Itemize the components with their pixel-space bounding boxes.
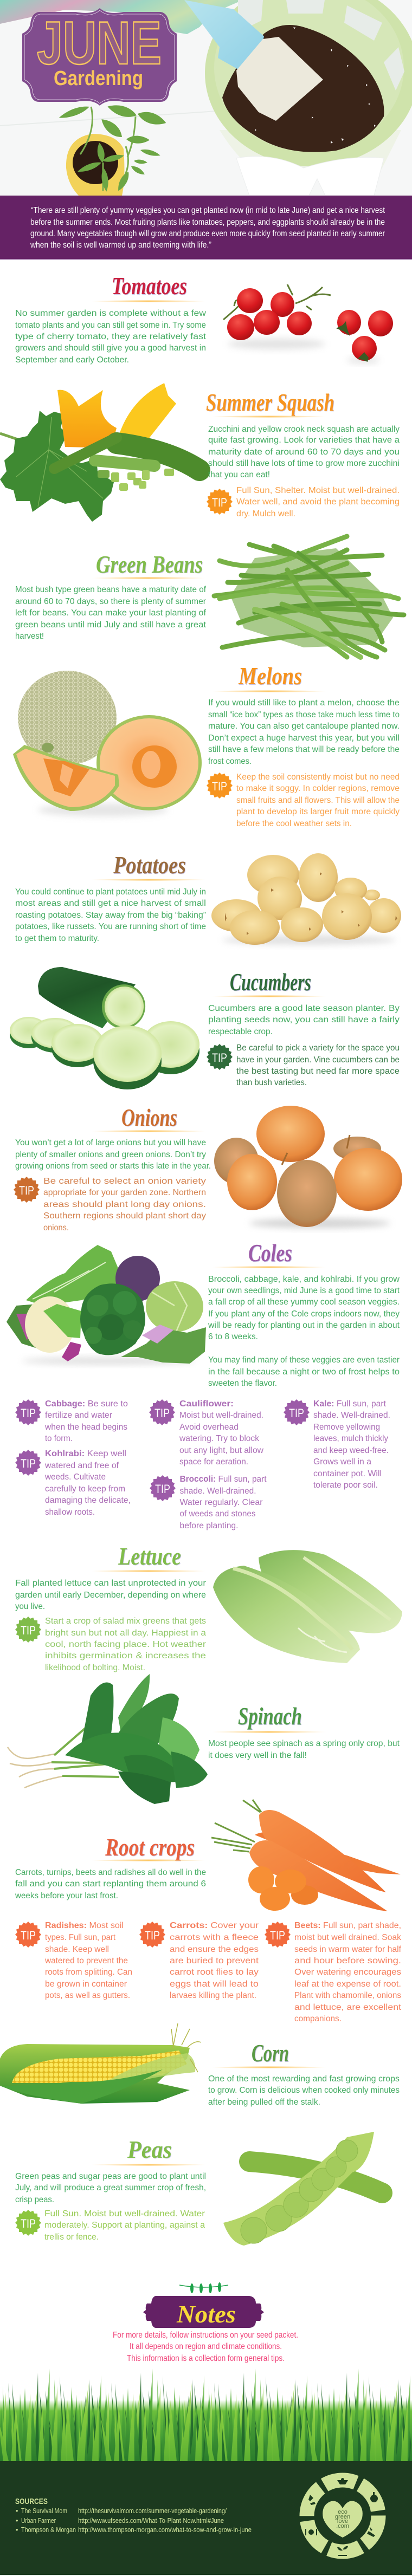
icon: cantaloupes [13,671,202,816]
onions text: You won’t get a lot of large onions but you will have [15,1138,206,1147]
root crops text: fall and you can start replanting them around 6 [15,1879,206,1889]
tomatoes text: No summer garden is complete without a few [15,309,207,318]
lettuce tip text: likelihood of bolting. Moist. [45,1663,145,1672]
sources list: • [16,2517,18,2525]
potatoes text: You could continue to plant potatoes until mid July in [15,887,206,897]
icon: cucumber and slices [10,967,199,1089]
tip: beets: and lettuce, are excellent [294,2003,402,2012]
tip badge: peas: TIP [21,2217,36,2230]
section: cucumbers [10,967,400,1089]
cucumbers tip text: Be careful to pick a variety for the space you [236,1043,400,1053]
logo: eco green love [305,2478,378,2556]
intro quote banner: when the soil is well warmed up and teeming with life.” [30,241,211,250]
tip: radishes: be grown in container [45,1980,127,1989]
melons text: mature. You can also get cantaloupe planted now. [208,722,400,731]
tip: cauliflower: Cauliflower: [179,1399,234,1409]
tip: beets: TIP [270,1929,285,1942]
root crops text: Carrots, turnips, beets and radishes all do well in the [15,1868,206,1877]
cucumbers text: Cucumbers are a good late season planter. By [208,1004,400,1013]
notes text: For more details, follow instructions on your seed packet. [113,2331,298,2340]
potatoes text: most areas and still get a nice harvest of small [15,899,206,908]
section: coles [7,1239,400,1530]
heading: melons: Melons [238,662,302,690]
potatoes text: potatoes, like russets. You are running short of time [15,922,206,931]
logo: eco green love: green [335,2514,350,2520]
tip: beets: and hour before sowing. [294,1956,401,1965]
heading: cucumbers: Cucumbers [230,968,311,996]
lettuce text [15,1579,206,1611]
icon: romaine lettuce [213,1550,402,1663]
tip: carrots: are buried to prevent [170,1956,259,1965]
tip: kohlrabi: watered and free of [44,1461,119,1470]
sources list: Thompson & Morgan [21,2526,76,2534]
squash text: should still have lots of time to grow more zucchini [208,459,400,468]
tip: carrots: Carrots: Cover your [170,1921,259,1930]
cucumbers text: planting seeds now, you can still have a fairly [208,1015,400,1024]
tip: kohlrabi: damaging the delicate, [45,1496,131,1505]
tip badge: melons [207,773,233,799]
heading: summer squash: Summer Squash [206,388,334,416]
heading: root crops: Root crops [105,1833,195,1861]
tip: beets: moist but well drained. Soak [294,1933,401,1942]
heading: tomatoes: Tomatoes [112,272,187,300]
tip: cabbage: Cabbage: Be sure to [45,1399,128,1409]
melons tip text: plant to develop its larger fruit more quickly [236,807,400,816]
peas tip text: Full Sun. Moist but well-drained. Water [44,2209,205,2218]
corn text: after being pulled off the stalk. [208,2098,320,2107]
notes text [113,2331,298,2363]
section: green beans [15,536,404,657]
tip: radishes: Radishes: Most soil [45,1921,124,1930]
section: potatoes [15,851,401,945]
coles text: a fall crop of all these yummy cool season veggies. [208,1297,400,1307]
cucumbers tip text [236,1043,400,1087]
icon: cherry tomatoes [223,284,393,364]
tip: broccoli: Water regularly. Clear [180,1498,262,1507]
title: June: JUNE [37,9,162,77]
tip: kale: TIP [289,1406,304,1420]
peas tip text: trellis or fence. [44,2233,99,2242]
tip: kale: leaves, mulch thickly [313,1434,388,1443]
tip: kale: Remove yellowing [313,1423,380,1432]
root crops text [15,1868,206,1900]
tip badge: squash [207,489,233,515]
notes text: This information is a collection form general tips. [127,2354,285,2363]
root crops text: weeks before your last frost. [15,1891,118,1900]
spinach text: it does very well in the fall! [208,1751,307,1760]
peas tip text: moderately. Support at planting, against a [44,2221,205,2230]
tip: cabbage: when the head begins [44,1423,127,1432]
title badge [22,8,177,106]
tip: broccoli: before planting. [180,1521,239,1530]
onions tip text [43,1177,206,1232]
tip: cauliflower: Avoid overhead [179,1423,239,1432]
tomatoes text: September and early October. [15,355,129,365]
sources list: Urban Farmer [21,2517,56,2525]
tip: kohlrabi: shallow roots. [45,1508,95,1517]
cucumbers tip text: have in your garden. Vine cucumbers can be [236,1055,400,1065]
heading: corn: Corn [252,2039,289,2067]
tip: kale: shade. Well-drained. [313,1411,390,1420]
beans text: around 60 to 70 days, so there is plenty of summer [15,597,206,606]
icon: flowered glove [0,0,243,34]
tip: kohlrabi: weeds. Cultivate [44,1472,106,1482]
lettuce tip text [45,1617,206,1672]
heading: potatoes: Potatoes [113,851,186,879]
squash text: maturity date of around 60 to 70 days and you [208,447,400,457]
icon: pea pods [223,2132,382,2246]
squash tip text: dry. Mulch well. [236,509,295,518]
tip: cabbage: TIP [21,1406,36,1420]
notes badge [143,2296,264,2328]
section: summer squash [0,383,400,522]
onions tip text: areas should plant long day onions. [43,1200,206,1209]
tip: carrots: eggs that will lead to [170,1980,259,1989]
lettuce tip text: Start a crop of salad mix greens that gets [45,1617,206,1626]
potatoes text: to get them to maturity. [15,934,99,943]
icon: pot [205,0,412,196]
tip: cauliflower: space for aeration. [179,1457,248,1467]
onions text [15,1138,211,1171]
heading: spinach: Spinach [238,1702,302,1730]
icon: seedling in yellow pot [57,102,168,196]
lettuce text: you live. [15,1602,45,1611]
tip: beets [265,1921,402,2023]
sources list: • [16,2507,18,2515]
tip: kohlrabi: carefully to keep from [45,1484,125,1494]
lettuce text: garden until early December, depending on where [15,1591,206,1600]
tip: beets: seeds in warm water for half [294,1945,402,1954]
sources list: The Survival Mom [21,2507,67,2515]
icon: onions [214,1106,402,1228]
peas tip text [44,2209,205,2242]
corn text: to grow. Corn is delicious when cooked only minutes [208,2086,400,2095]
tip: cauliflower [149,1399,264,1467]
tip: carrots: carrots with a fleece [170,1933,259,1942]
melons tip text: before the cool weather sets in. [236,819,352,828]
melons text: still have a few melons that will be ready before the [208,745,400,754]
section: corn [0,2023,400,2107]
cucumbers text: respectable crop. [208,1027,273,1036]
tip badge: lettuce: TIP [21,1624,36,1637]
tip: cabbage: fertilize and water [45,1411,112,1420]
tip: cauliflower: TIP [154,1406,170,1420]
lettuce text: Fall planted lettuce can last unprotected in your [15,1579,206,1588]
tip: carrots: larvaes killing the plant. [170,1991,256,2000]
onions tip text: Southern regions should plant short day [43,1211,206,1221]
coles text: Broccoli, cabbage, kale, and kohlrabi. If you grow [208,1275,400,1284]
squash tip text: Water well, and avoid the plant becoming [236,497,400,507]
spinach text [208,1739,400,1760]
tip: beets: leaf at the expense of root. [294,1980,401,1989]
tip: radishes: shade. Keep well [45,1945,109,1954]
tip badge: lettuce [15,1617,41,1643]
tip: kale: and keep weed-free. [313,1446,389,1455]
sources list: http://www.thompson-morgan.com/what-to-sow-and-grow-in-june [78,2526,252,2534]
tip: kale: tolerate poor soil. [313,1481,378,1490]
tip badge: squash: TIP [212,496,227,509]
heading: peas: Peas [127,2136,172,2163]
sources list: • [16,2526,18,2534]
icon: cole crops [7,1245,206,1365]
melons tip text: Keep the soil consistently moist but no need [236,773,400,782]
section: spinach [8,1674,400,1804]
icon: carrots [211,1800,401,1911]
icon: squash, flower and leaf [0,383,199,522]
coles text: sweeten the flavor. [208,1379,277,1388]
heading: onions: Onions [121,1104,177,1131]
peas text: July, and will produce a great summer crop of fresh, [15,2183,206,2192]
section: onions [14,1104,402,1232]
section: peas [15,2132,382,2246]
peas text [15,2172,206,2204]
tip: beets: Plant with chamomile, onions [294,1991,401,2000]
logo: eco green love: .com [336,2523,349,2529]
lettuce tip text: bright sun but not all day. Happiest in a [45,1628,206,1638]
tip: broccoli: Broccoli: Full sun, part [180,1475,267,1484]
icon: spinach bunch [8,1674,208,1804]
squash text: Zucchini and yellow crook neck squash are actually [208,425,400,434]
onions text: plenty of smaller onions and green onions. Don’t try [15,1150,206,1159]
section: melons [13,662,400,828]
tip: radishes: watered to prevent the [44,1956,128,1965]
heading: coles: Coles [248,1239,292,1267]
cucumbers text [208,1004,400,1036]
corn text [208,2074,400,2107]
tip: carrots: carrot root flies to lay [170,1968,259,1977]
onions text: growing onions from seed or starts this late in the year. [15,1162,211,1171]
tip: radishes: types. Full sun, part [45,1933,116,1942]
tomatoes text: growers and should still give you a good harvest in [15,343,206,353]
tip: broccoli [150,1475,267,1530]
potatoes text: roasting potatoes. Stay away from the big “baking” [15,911,206,920]
icon: corn cob [0,2023,201,2104]
peas text: Green peas and sugar peas are good to plant until [15,2172,206,2181]
cucumbers tip text: the best tasting but need far more space [236,1067,400,1076]
peas text: crisp peas. [15,2195,54,2204]
tomatoes text: tomato plants and you can still get some in. Try some [15,321,206,330]
footer: sources and logo [0,2461,412,2576]
tomatoes text: type of cherry tomato, they are relatively fast [15,332,207,341]
tip: radishes: roots from splitting. Can [45,1968,132,1977]
squash text [208,425,400,479]
melons text: small “ice box” types as those take much less time to [208,710,400,719]
squash tip text: Full Sun, Shelter. Moist but well-drained. [236,486,400,495]
logo: eco green love: love [337,2518,348,2525]
tip: carrots: TIP [145,1929,160,1942]
tip: kale: Kale: Full sun, part [313,1399,387,1409]
coles text: 6 to 8 weeks. [208,1332,258,1341]
sources list [16,2507,252,2534]
tip: beets: Over watering encourages [294,1968,401,1977]
tip badge: onions: TIP [19,1184,34,1197]
tip: radishes: pots, as well as gutters. [45,1991,130,2000]
tip: cabbage [15,1399,128,1443]
tip badge: cucumbers [207,1044,233,1070]
tip: radishes: TIP [21,1929,36,1942]
tip: carrots: and ensure the edges [170,1945,259,1954]
notes text: It all depends on region and climate conditions. [130,2342,282,2351]
tip: kale [284,1399,390,1490]
tip: kohlrabi [15,1449,131,1517]
title: Gardening: Gardening [54,67,143,90]
section: notes [113,2282,298,2363]
coles text: will be ready for planting out in the garden in about [208,1321,400,1330]
beans text: harvest! [15,632,44,641]
section: root crops [15,1800,402,2023]
tip badge: cucumbers: TIP [212,1051,227,1065]
coles text: your own seedlings, mid June is a good time to start [208,1286,400,1295]
tip: cauliflower: Moist but well-drained. [179,1411,263,1420]
coles text: You may find many of these veggies are even tastier [208,1355,400,1365]
grass border [0,2369,412,2468]
tomatoes text [15,309,207,365]
tip: kohlrabi: Kohlrabi: Keep well [45,1449,126,1458]
melons text: If you would still like to plant a melon, choose the [208,698,400,708]
tip: radishes [15,1921,132,2000]
beans text: green beans until mid July and still have a great [15,620,207,630]
potatoes text [15,887,206,943]
tip: cauliflower: out any light, but allow [179,1446,264,1455]
lettuce tip text: cool, north facing place. Hot weather [45,1640,206,1649]
onions tip text: onions. [43,1223,69,1232]
hero photo: gardening pot and seedling [0,0,412,196]
melons tip text [236,773,400,828]
icon: sprig [179,2282,228,2293]
tip: beets: companions. [294,2014,342,2023]
coles text: If you plant any of the Cole crops indoors now, they [208,1309,400,1319]
heading: lettuce: Lettuce [118,1542,181,1570]
tip: carrots [139,1921,259,2000]
melons text: Don’t expect a huge harvest this year, but you will [208,734,400,743]
tip: kale: container pot. Will [313,1469,382,1478]
cucumbers tip text: than bush varieties. [236,1078,307,1087]
sources heading: SOURCES [15,2497,48,2506]
melons tip text: small fruits and all flowers. This will allow the [236,796,400,805]
icon: green beans [214,536,404,657]
section: lettuce [15,1542,402,1672]
spinach text: Most people see spinach as a spring only crop, but [208,1739,400,1748]
tip badge: peas [15,2210,41,2236]
tip: broccoli: TIP [155,1482,170,1496]
beans text: Most bush type green beans have a maturity date of [15,585,207,594]
lettuce tip text: inhibits germination & increases the [45,1651,206,1660]
squash text: quite fast growing. Look for varieties that have a [208,436,400,445]
corn text: One of the most rewarding and fast growing crops [208,2074,400,2084]
tip: cabbage: to form. [45,1434,73,1443]
coles text [208,1275,400,1388]
tip badge: onions [14,1177,40,1203]
sources list: http://thesurvivalmom.com/summer-vegetable-gardening/ [78,2507,227,2515]
tip: cauliflower: watering. Try to block [179,1434,259,1443]
sources list: http://www.ufseeds.com/What-To-Plant-Now.html#June [78,2517,224,2525]
tip: broccoli: shade. Well-drained. [180,1487,256,1496]
onions tip text: appropriate for your garden zone. Northern [43,1188,206,1197]
tip: beets: Beets: Full sun, part shade, [294,1921,401,1930]
section: tomatoes [15,272,393,365]
beans text: left for beans. You can make your last planting of [15,608,207,618]
melons text [208,698,400,766]
tip: kale: Grows well in a [313,1457,371,1467]
heading: green beans: Green Beans [96,550,203,578]
coles text: in the fall because a night or two of frost helps to [208,1367,400,1377]
intro quote banner [0,196,412,260]
notes badge: Notes [176,2300,236,2328]
tip badge: melons: TIP [212,780,227,793]
icon: potatoes [211,853,401,945]
tip: broccoli: of weeds and stones [180,1509,256,1519]
squash text: that you can eat! [208,470,270,479]
tip: kohlrabi: TIP [21,1457,36,1470]
onions tip text: Be careful to select an onion variety [43,1177,206,1186]
icon: trowel [184,0,323,121]
beans text [15,585,207,641]
logo: eco green love: eco [338,2509,347,2515]
squash tip text [236,486,400,518]
melons text: frost comes. [208,757,252,766]
melons tip text: to make it soggy. In colder regions, remove [236,784,400,793]
